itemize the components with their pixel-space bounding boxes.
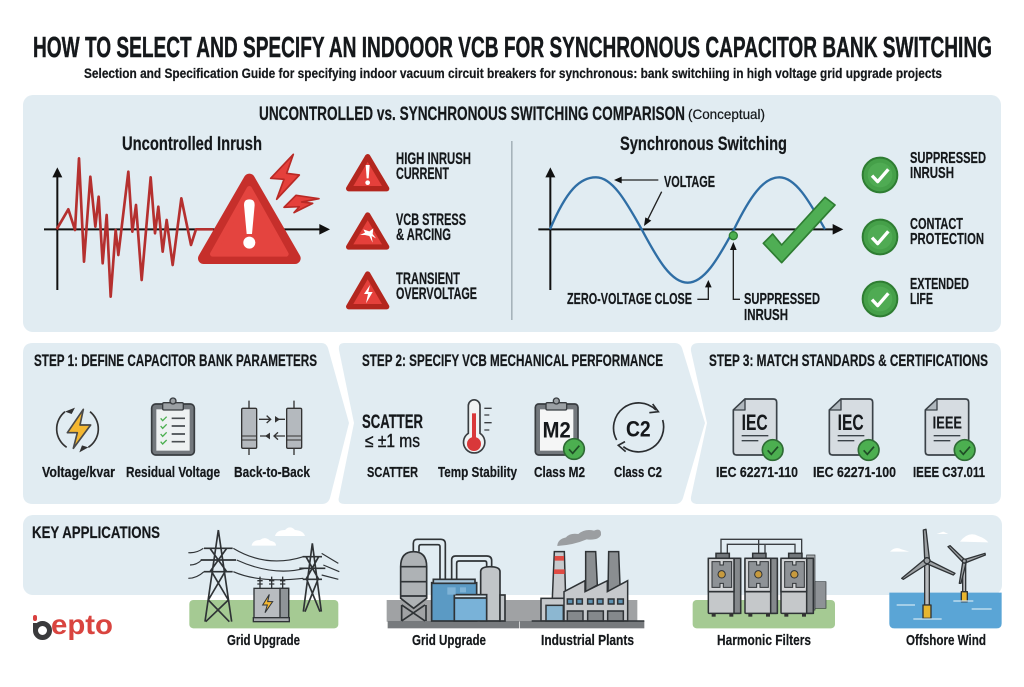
illustration: industrial plants <box>520 530 644 628</box>
label: class M2: Class M2 <box>534 464 585 481</box>
label: suppressed inrush: SUPPRESSED <box>910 150 986 167</box>
icon: residual voltage clipboard <box>152 398 194 455</box>
label: vcb stress: & ARCING <box>396 226 451 244</box>
logo: bepto: epto <box>51 609 113 640</box>
icon: scatter value: SCATTER <box>362 412 423 433</box>
label: back-to-back: Back-to-Back <box>234 464 311 481</box>
icon: class M2 clipboard: M2 <box>543 417 571 442</box>
heading: uncontrolled inrush: Uncontrolled Inrush <box>122 134 262 155</box>
icon: class C2 cycle: C2 <box>626 417 651 442</box>
label: contact protection: PROTECTION <box>910 231 984 248</box>
label: suppressed inrush callout: SUPPRESSED <box>744 291 820 308</box>
icon: class M2 clipboard <box>535 398 584 459</box>
icon: IEEE C37.011 document <box>925 399 975 460</box>
label: IEC 62271-110: IEC 62271-110 <box>716 464 798 481</box>
heading: step 1: STEP 1: DEFINE CAPACITOR BANK PARAMETERS <box>34 352 317 370</box>
label: IEC 62271-100: IEC 62271-100 <box>813 464 896 481</box>
icon: high inrush warning <box>349 157 387 189</box>
label: extended life: EXTENDED <box>910 276 969 293</box>
label: transient overvoltage <box>396 270 477 303</box>
label: vcb stress: VCB STRESS <box>396 211 466 229</box>
chart: uncontrolled inrush waveform <box>44 154 330 297</box>
icon: large warning triangle <box>204 179 295 258</box>
illustration: grid upgrade <box>188 527 339 628</box>
icon: scatter value: ≤ ±1 ms <box>365 431 420 451</box>
label: IEEE C37.011: IEEE C37.011 <box>913 464 985 481</box>
label: high inrush current: HIGH INRUSH <box>396 150 471 168</box>
icon: IEC 62271-110 document: IEC <box>742 410 768 435</box>
icon: IEEE C37.011 document: IEEE <box>933 412 962 432</box>
label: transient overvoltage: OVERVOLTAGE <box>396 285 477 303</box>
label: transient overvoltage: TRANSIENT <box>396 270 460 288</box>
label: harmonic filters: Harmonic Filters <box>717 632 811 649</box>
panel heading: UNCONTROLLED vs. SYNCHRONOUS SWITCHING COMPARISON <box>259 104 685 125</box>
label: suppressed inrush callout: INRUSH <box>744 307 788 324</box>
label: voltage/kvar: Voltage/kvar <box>42 464 115 481</box>
label: grid upgrade (plant): Grid Upgrade <box>412 632 486 649</box>
label: contact protection: CONTACT <box>910 216 963 233</box>
illustration: offshore wind <box>889 529 1002 628</box>
label: zero-voltage close: ZERO-VOLTAGE CLOSE <box>567 291 692 308</box>
label: extended life <box>910 276 969 308</box>
icon: back-to-back capacitors <box>242 401 302 455</box>
label: industrial plants: Industrial Plants <box>541 632 634 649</box>
panel: key applications <box>23 515 1002 595</box>
label: grid upgrade: Grid Upgrade <box>227 632 300 649</box>
icon: arcing warning <box>349 215 387 247</box>
icon: thermometer <box>463 400 492 453</box>
icon: IEC 62271-110 document <box>733 399 783 460</box>
illustration: harmonic filters <box>693 539 835 628</box>
label: suppressed inrush callout <box>744 291 820 324</box>
label: contact protection <box>910 216 984 248</box>
icon: voltage/kvar <box>57 408 98 452</box>
label: residual voltage: Residual Voltage <box>126 464 220 481</box>
panel: switching comparison <box>23 95 1001 332</box>
label: scatter: SCATTER <box>367 464 418 481</box>
label: offshore wind: Offshore Wind <box>906 632 986 649</box>
icon: check suppressed inrush <box>863 158 897 192</box>
label: vcb stress <box>396 211 466 244</box>
heading: step 2: STEP 2: SPECIFY VCB MECHANICAL PERFORMANCE <box>362 352 663 370</box>
panel: step 1 <box>23 343 349 504</box>
heading: synchronous switching: Synchronous Switching <box>620 134 787 155</box>
icon: scatter value <box>362 412 423 451</box>
label: temp stability: Temp Stability <box>438 464 518 481</box>
label: high inrush current <box>396 150 471 183</box>
icon: lightning bolts <box>271 154 319 213</box>
heading: key applications: KEY APPLICATIONS <box>32 523 160 542</box>
label: suppressed inrush <box>910 150 986 182</box>
label: suppressed inrush: INRUSH <box>910 165 954 182</box>
label: voltage: VOLTAGE <box>664 174 715 191</box>
label: high inrush current: CURRENT <box>396 165 449 183</box>
label: class C2: Class C2 <box>614 464 662 481</box>
illustration: plant <box>387 539 550 628</box>
panel: step 2 <box>339 343 705 504</box>
panel heading: (Conceptual) <box>688 106 765 122</box>
chart: synchronous waveform <box>538 167 843 299</box>
icon: large check mark <box>763 197 835 263</box>
icon: IEC 62271-100 document: IEC <box>838 410 864 435</box>
icon: IEC 62271-100 document <box>829 399 879 460</box>
icon: overvoltage warning <box>349 274 387 307</box>
icon: class C2 cycle <box>614 403 664 452</box>
panel: step 3 <box>691 343 1001 504</box>
label: extended life: LIFE <box>910 291 933 308</box>
icon: check contact protection <box>863 220 897 254</box>
icon: check extended life <box>863 282 897 316</box>
